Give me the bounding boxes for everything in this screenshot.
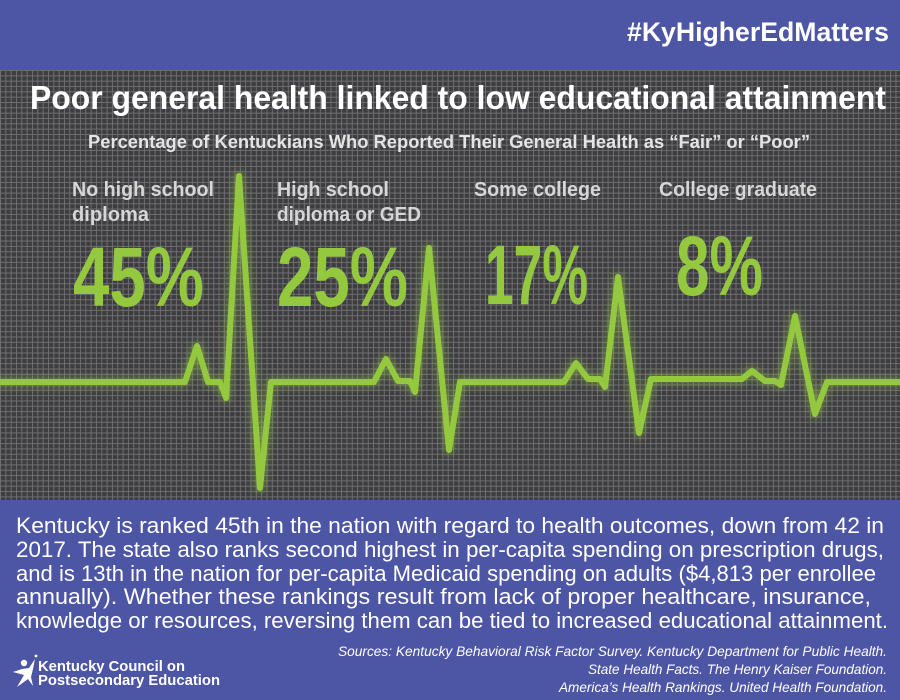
stat: no high school diploma: No high school xyxy=(72,179,214,201)
organisation name: Kentucky Council on xyxy=(38,658,185,675)
body paragraph: 2017. The state also ranks second highest in per-capita spending on prescription drugs, xyxy=(16,537,884,562)
stat: some college: 17% xyxy=(485,228,588,322)
sources: America’s Health Rankings. United Health Foundation. xyxy=(558,680,887,695)
panel: monitor grid xyxy=(0,70,900,500)
organisation name xyxy=(38,658,220,689)
stat: college graduate: College graduate xyxy=(659,179,817,201)
body paragraph: annually). Whether these rankings result from lack of proper healthcare, insurance, xyxy=(16,584,871,609)
sources: Sources: Kentucky Behavioral Risk Factor Survey. Kentucky Department for Public Health. xyxy=(338,644,887,659)
stat: no high school diploma: diploma xyxy=(72,204,150,226)
body paragraph: and is 13th in the nation for per-capita Medicaid spending on adults ($4,813 per enrollee xyxy=(16,561,876,586)
footer band xyxy=(0,500,900,700)
stat: high school diploma or GED: diploma or GED xyxy=(277,204,421,226)
body paragraph xyxy=(16,513,888,633)
heartbeat line xyxy=(0,176,900,488)
stat: some college xyxy=(474,179,601,322)
header band xyxy=(0,0,900,70)
sources xyxy=(338,644,887,695)
body paragraph: knowledge or resources, reversing them can be tied to increased educational attainment. xyxy=(16,608,888,633)
body paragraph: Kentucky is ranked 45th in the nation with regard to health outcomes, down from 42 in xyxy=(16,513,884,538)
stat: high school diploma or GED: 25% xyxy=(277,230,408,324)
stat: some college: Some college xyxy=(474,179,601,201)
logo: Kentucky Council on Postsecondary Education xyxy=(13,655,220,689)
organisation name: Postsecondary Education xyxy=(38,672,220,689)
subtitle: Percentage of Kentuckians Who Reported Their General Health as “Fair” or “Poor” xyxy=(88,132,810,152)
hashtag: #KyHigherEdMatters xyxy=(627,17,889,47)
stat: no high school diploma xyxy=(72,179,214,324)
stat: high school diploma or GED: High school xyxy=(277,179,389,201)
stat: no high school diploma: 45% xyxy=(73,230,204,324)
stat: high school diploma or GED xyxy=(277,179,421,324)
title: Poor general health linked to low educational attainment xyxy=(30,79,886,116)
sources: State Health Facts. The Henry Kaiser Foundation. xyxy=(588,662,887,677)
stat: college graduate xyxy=(659,179,817,313)
icon: star figure xyxy=(13,655,37,687)
stat: college graduate: 8% xyxy=(676,219,763,313)
